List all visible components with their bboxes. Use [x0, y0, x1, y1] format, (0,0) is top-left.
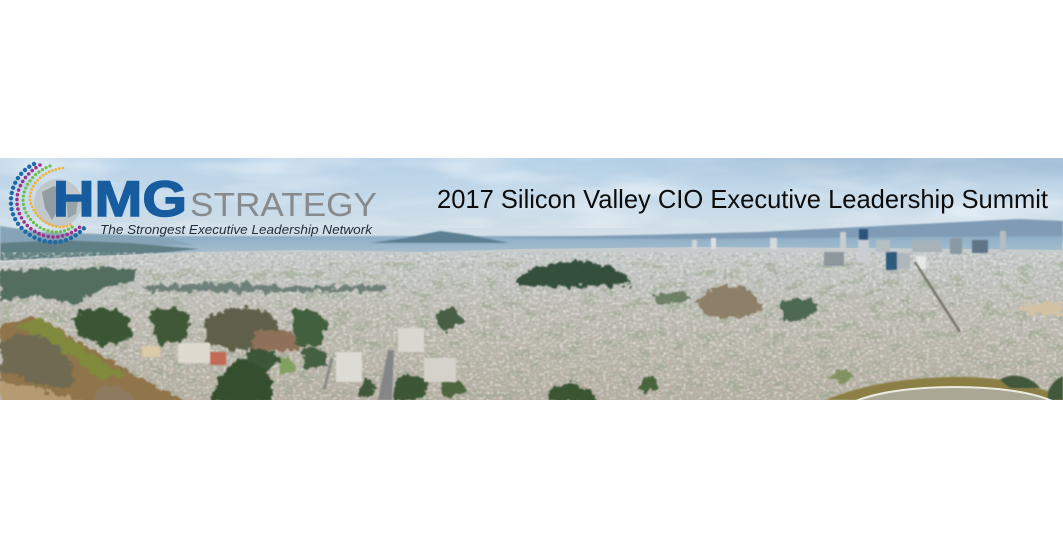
icon: globe — [34, 179, 82, 227]
park greenery and woods — [0, 262, 1063, 332]
foreground trees and houses left — [72, 307, 854, 402]
downtown skyline — [692, 229, 1006, 332]
sky — [0, 158, 1063, 243]
foreground hillside — [0, 318, 190, 404]
rooftops speckle texture — [0, 252, 1063, 400]
HMG Strategy logo — [11, 164, 377, 242]
foreground houses — [142, 328, 456, 400]
logo wordmark HMG: HMG — [53, 171, 187, 227]
title: 2017 Silicon Valley CIO Executive Leadership Summit — [437, 184, 1049, 214]
overlook road — [825, 376, 1063, 401]
distant mountains and bay — [0, 219, 1063, 261]
icon: coloured dotted arcs — [11, 164, 85, 242]
banner infographic — [0, 158, 1063, 400]
city base — [0, 247, 1063, 400]
logo wordmark STRATEGY: STRATEGY — [190, 186, 377, 223]
logo tagline: The Strongest Executive Leadership Network — [100, 222, 374, 237]
panoramic photo banner — [0, 140, 1063, 404]
